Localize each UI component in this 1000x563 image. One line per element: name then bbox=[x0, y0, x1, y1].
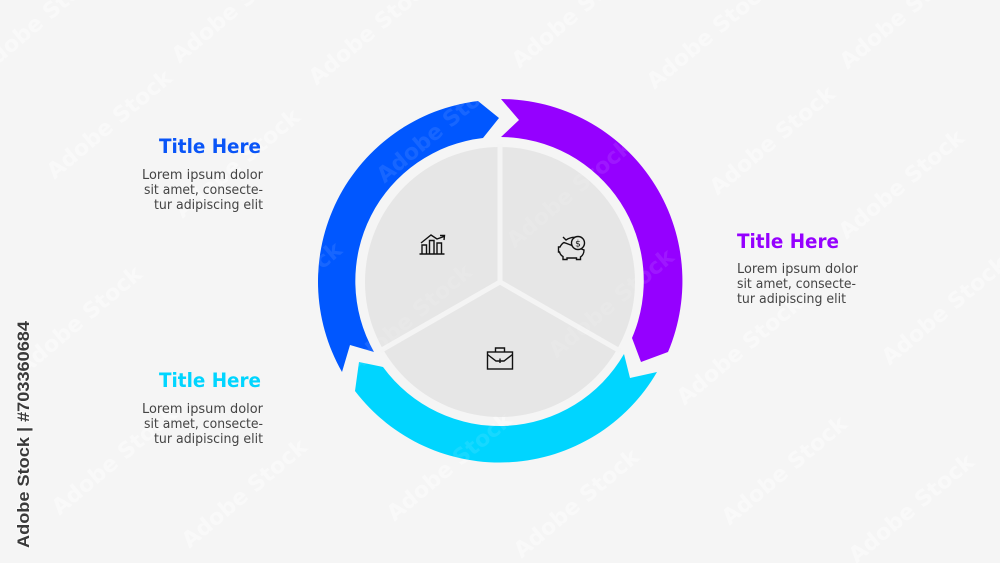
watermark: faint layer over the diagram: Adobe Stock bbox=[212, 237, 348, 357]
icon: piggy bank with coin bbox=[558, 236, 584, 260]
body: purple text: sit amet, consecte- bbox=[737, 277, 856, 292]
icon: briefcase bbox=[488, 348, 512, 369]
watermark: background layer: Adobe Stock bbox=[42, 65, 178, 185]
body: blue text: tur adipiscing elit bbox=[154, 198, 263, 213]
heading: blue title: Title Here bbox=[159, 135, 261, 158]
watermark: faint layer over the diagram: Adobe Stock bbox=[382, 407, 518, 527]
watermark: faint layer over the diagram: Adobe Stock bbox=[544, 244, 680, 364]
stock id label: Adobe Stock | #703360684 bbox=[14, 320, 33, 548]
body: cyan text: tur adipiscing elit bbox=[154, 432, 263, 447]
arrow segment: blue bbox=[318, 101, 499, 372]
watermark: background layer: Adobe Stock bbox=[382, 407, 518, 527]
watermark: background layer: Adobe Stock bbox=[672, 291, 808, 411]
watermark: background layer: Adobe Stock bbox=[717, 411, 853, 531]
watermark: background layer: Adobe Stock bbox=[177, 434, 313, 554]
text block: purple title and body bbox=[737, 230, 859, 307]
watermark: faint layer over the diagram: Adobe Stock bbox=[502, 134, 638, 254]
body: blue text: sit amet, consecte- bbox=[144, 183, 263, 198]
watermark: background layer: Adobe Stock bbox=[509, 444, 645, 563]
body: cyan text bbox=[142, 402, 264, 447]
body: purple text: Lorem ipsum dolor bbox=[737, 262, 859, 277]
icon: bar chart with arrow bbox=[420, 235, 444, 254]
watermark: faint layer over the diagram: Adobe Stock bbox=[372, 69, 508, 189]
watermark: background layer: Adobe Stock bbox=[705, 81, 841, 201]
body: cyan text: sit amet, consecte- bbox=[144, 417, 263, 432]
watermark: background layer: Adobe Stock bbox=[170, 104, 306, 224]
arrow segment: purple bbox=[501, 99, 682, 362]
icon: piggy bank with coin: $ bbox=[575, 240, 581, 250]
body: blue text bbox=[142, 168, 264, 213]
body: purple text bbox=[737, 262, 859, 307]
body: purple text: tur adipiscing elit bbox=[737, 292, 846, 307]
watermark: faint layer over the diagram bbox=[212, 69, 680, 527]
body: blue text: Lorem ipsum dolor bbox=[142, 168, 264, 183]
watermark: background layer: Adobe Stock bbox=[12, 261, 148, 381]
text block: blue title and body bbox=[142, 135, 264, 213]
watermark: background layer: Adobe Stock bbox=[47, 401, 183, 521]
watermark: faint layer over the diagram: Adobe Stock bbox=[342, 259, 478, 379]
watermark: background layer: Adobe Stock bbox=[834, 125, 970, 245]
arrow segment: cyan bbox=[355, 354, 657, 463]
heading: purple title: Title Here bbox=[737, 230, 839, 253]
heading: cyan title: Title Here bbox=[159, 369, 261, 392]
donut chart: three sector disc bbox=[365, 144, 635, 417]
text block: cyan title and body bbox=[142, 369, 264, 447]
body: cyan text: Lorem ipsum dolor bbox=[142, 402, 264, 417]
